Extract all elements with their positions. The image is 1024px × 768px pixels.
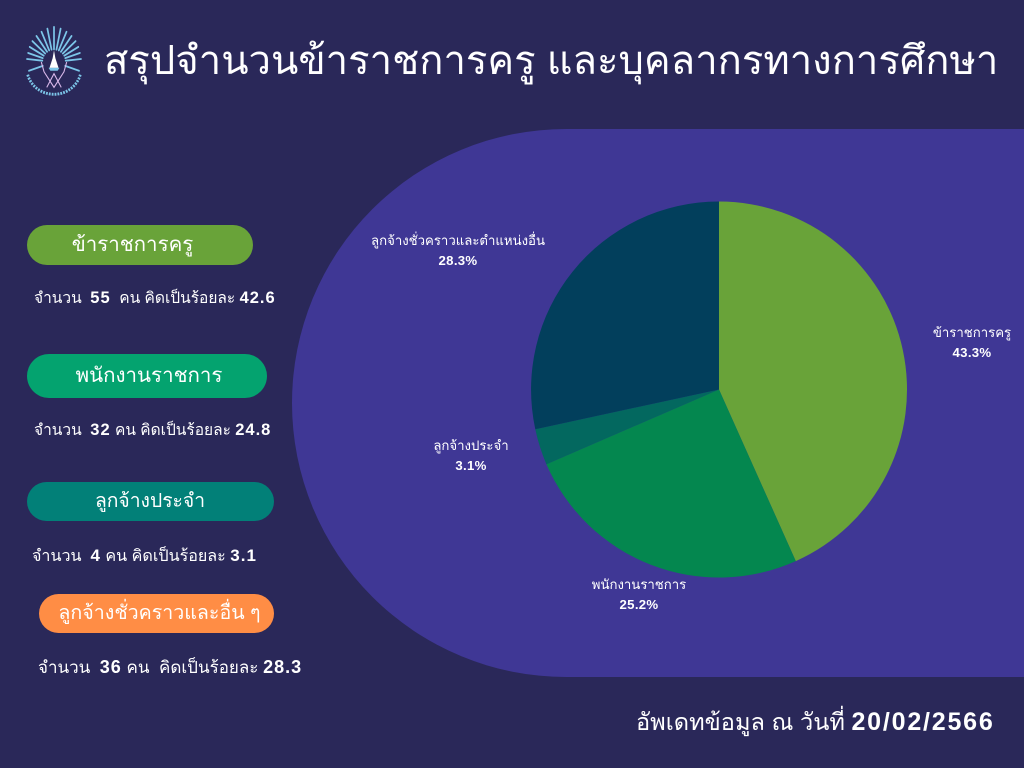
heading: permanent employees <box>27 482 274 521</box>
heading: teachers <box>27 225 253 265</box>
label: temporary employees share: ลูกจ้างชั่วคราวและตำแหน่งอื่น <box>371 233 545 248</box>
text: permanent employees figures: จำนวน 4 คน คิดเป็นร้อยละ 3.1 <box>32 546 257 565</box>
heading: teachers: ข้าราชการครู <box>72 233 193 256</box>
label: temporary employees share: 28.3% <box>439 253 477 268</box>
icon: logo <box>26 26 82 96</box>
slice: permanent employees <box>535 390 719 464</box>
panel: temporary employees summary <box>38 594 302 677</box>
pie chart <box>531 202 907 578</box>
text: temporary employees figures: จำนวน 36 คน คิดเป็นร้อยละ 28.3 <box>38 657 302 677</box>
label: permanent employees share <box>433 438 509 473</box>
heading: temporary employees: ลูกจ้างชั่วคราวและอื่น ๆ <box>58 602 261 624</box>
panel: chart background <box>292 129 1024 677</box>
label: civil servants share: 25.2% <box>620 597 658 612</box>
text: update date: อัพเดทข้อมูล ณ วันที่ 20/02/2566 <box>636 708 995 736</box>
slice: civil servants <box>546 390 796 578</box>
label: civil servants share: พนักงานราชการ <box>592 577 686 592</box>
label: permanent employees share: ลูกจ้างประจำ <box>433 438 509 453</box>
slice: temporary employees <box>531 202 719 429</box>
heading: civil servants: พนักงานราชการ <box>76 364 222 387</box>
label: teachers share <box>933 325 1011 360</box>
panel: permanent employees summary <box>27 482 274 565</box>
heading: temporary employees <box>39 594 274 633</box>
slice: teachers <box>719 202 907 561</box>
text: civil servants figures: จำนวน 32 คน คิดเป็นร้อยละ 24.8 <box>34 421 271 439</box>
panel: civil servants summary <box>27 354 271 439</box>
label: teachers share: 43.3% <box>953 345 991 360</box>
title: สรุปจำนวนข้าราชการครู และบุคลากรทางการศึกษา <box>104 39 998 83</box>
heading: permanent employees: ลูกจ้างประจำ <box>95 491 205 512</box>
label: permanent employees share: 3.1% <box>455 458 487 473</box>
label: temporary employees share <box>371 232 545 268</box>
heading: civil servants <box>27 354 267 398</box>
label: teachers share: ข้าราชการครู <box>933 325 1011 340</box>
text: teachers figures: จำนวน 55 คน คิดเป็นร้อยละ 42.6 <box>34 289 276 307</box>
label: civil servants share <box>592 577 686 612</box>
panel: teachers summary <box>27 225 276 307</box>
